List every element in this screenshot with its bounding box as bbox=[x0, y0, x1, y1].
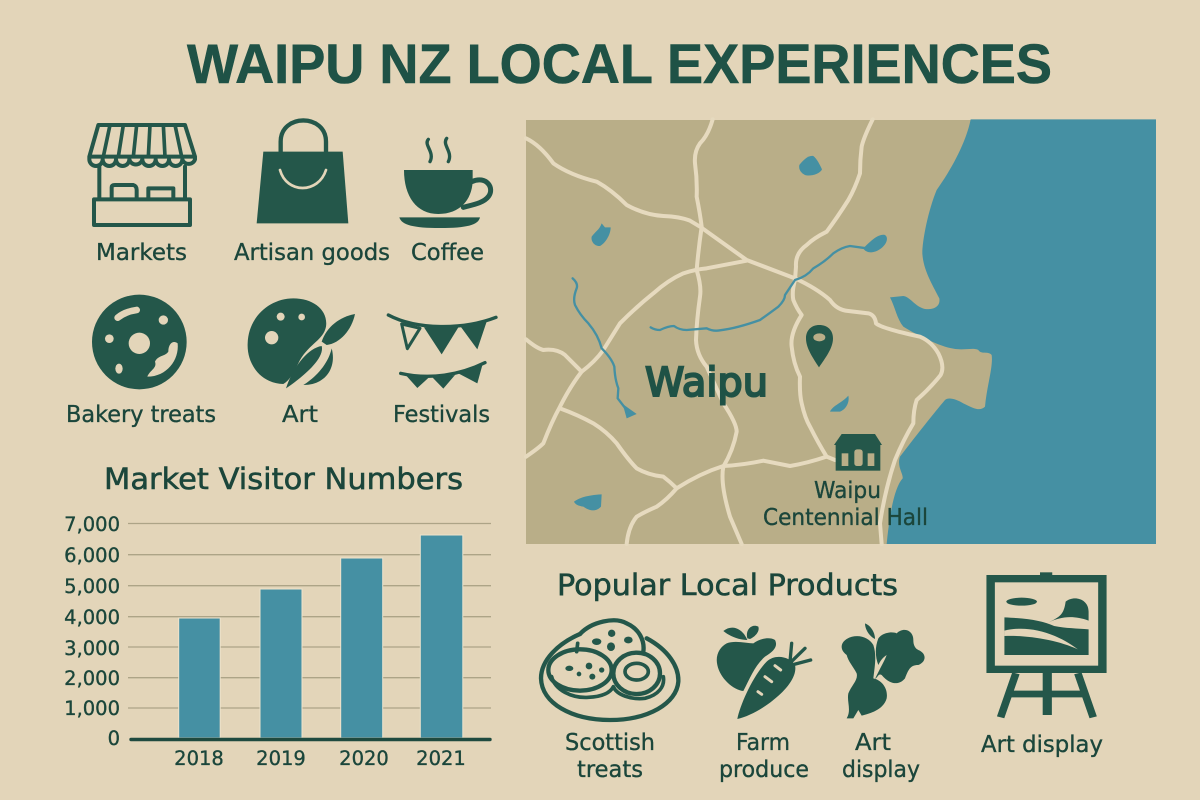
title: WAIPU NZ LOCAL EXPERIENCES bbox=[187, 32, 1052, 95]
icon: bakery donut bbox=[92, 295, 187, 389]
icon: map pin bbox=[806, 325, 833, 367]
y axis labels: 6,000 bbox=[64, 544, 120, 567]
label: Farm produce: produce bbox=[719, 755, 809, 783]
y axis labels: 0 bbox=[108, 727, 120, 750]
rivers bbox=[573, 246, 867, 410]
map land bbox=[526, 120, 1156, 544]
icon: festival bunting bbox=[388, 315, 496, 389]
chart heading: Market Visitor Numbers bbox=[104, 462, 463, 496]
icon: easel with painting bbox=[991, 572, 1102, 717]
x axis year labels: 2020 bbox=[339, 747, 389, 770]
icon: coffee cup bbox=[399, 138, 491, 228]
panel: map of Waipu bbox=[526, 119, 1156, 544]
icon: leafy vegetable bbox=[842, 623, 925, 718]
y axis labels bbox=[64, 513, 120, 750]
map label: Waipu Centennial Hall: Centennial Hall bbox=[763, 503, 928, 531]
map label: Waipu Centennial Hall bbox=[763, 476, 928, 531]
label: Scottish treats bbox=[565, 728, 655, 783]
map sea bbox=[887, 119, 1156, 544]
label: Bakery treats: Bakery treats bbox=[66, 400, 216, 428]
y axis labels: 2,000 bbox=[64, 667, 120, 690]
panel: popular local products bbox=[541, 568, 1103, 783]
icon: scottish treats plate bbox=[541, 620, 678, 720]
y axis labels: 1,000 bbox=[64, 697, 120, 720]
label: Artisan goods: Artisan goods bbox=[234, 238, 390, 266]
label: Art display (small): Art bbox=[855, 728, 891, 756]
y axis labels: 3,000 bbox=[64, 637, 120, 660]
x axis year labels: 2018 bbox=[174, 747, 224, 770]
icon: market stall bbox=[89, 125, 195, 225]
lakes bbox=[574, 156, 887, 510]
bars bbox=[179, 535, 463, 738]
label: Farm produce: Farm bbox=[736, 728, 790, 756]
label: Art display (easel): Art display bbox=[981, 730, 1103, 758]
label: Art display (small) bbox=[842, 728, 920, 783]
y axis labels: 7,000 bbox=[64, 513, 120, 536]
label: Markets: Markets bbox=[96, 238, 187, 266]
y axis labels: 5,000 bbox=[64, 575, 120, 598]
x axis year labels: 2021 bbox=[416, 747, 466, 770]
icon: apple and carrot bbox=[717, 626, 811, 719]
map label: Waipu Centennial Hall: Waipu bbox=[814, 476, 881, 504]
panel: experiences icons bbox=[66, 120, 496, 428]
label: Scottish treats: Scottish bbox=[565, 728, 655, 756]
icon: art palette and brushes bbox=[248, 298, 355, 388]
icon: shopping bag bbox=[257, 120, 348, 223]
label: Coffee: Coffee bbox=[411, 238, 484, 266]
x axis line bbox=[131, 738, 490, 741]
roads bbox=[526, 119, 942, 544]
map label: Waipu: Waipu bbox=[645, 360, 768, 406]
label: Farm produce bbox=[719, 728, 809, 783]
label: Art: Art bbox=[282, 400, 318, 428]
label: Art display (small): display bbox=[842, 755, 920, 783]
icon: centennial hall bbox=[834, 434, 882, 471]
y axis labels: 4,000 bbox=[64, 606, 120, 629]
x axis year labels bbox=[174, 747, 466, 770]
label: Festivals: Festivals bbox=[393, 400, 490, 428]
section heading: Popular Local Products bbox=[557, 568, 898, 602]
panel: bar chart of market visitor numbers bbox=[64, 462, 491, 770]
label: Scottish treats: treats bbox=[577, 755, 643, 783]
x axis year labels: 2019 bbox=[256, 747, 306, 770]
